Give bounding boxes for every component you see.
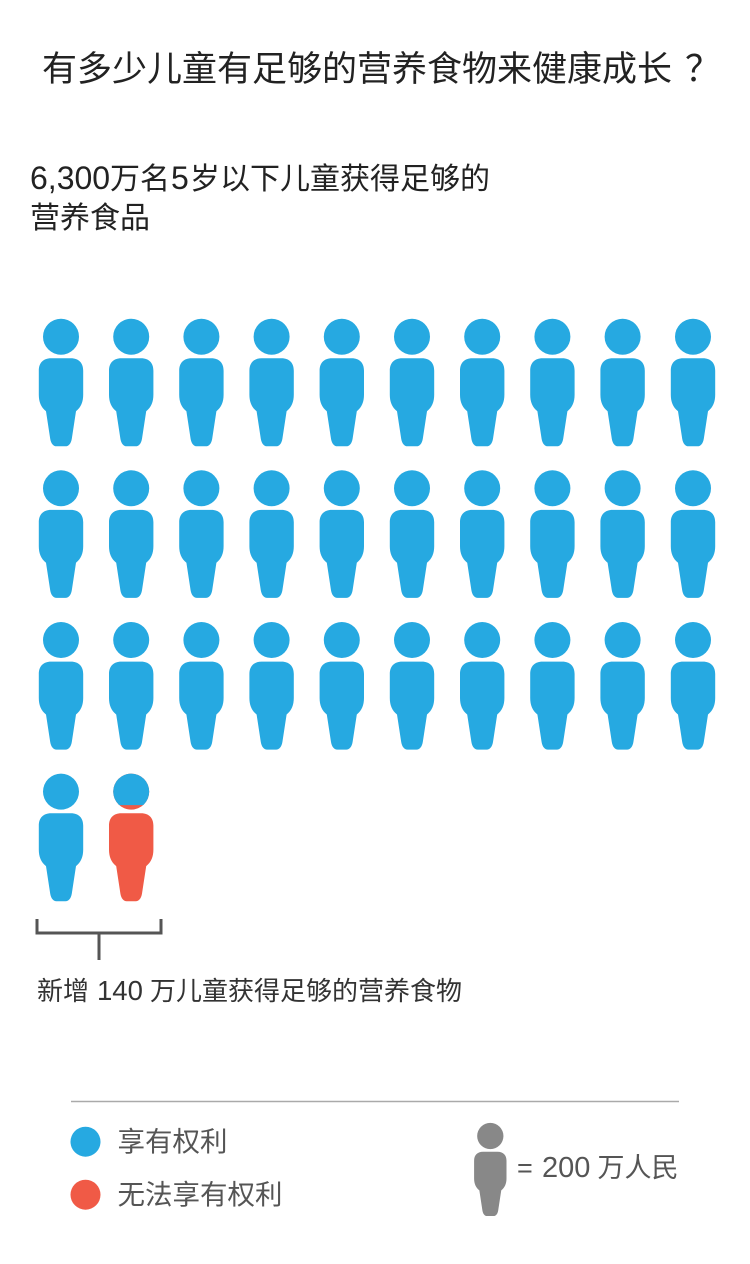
legend: person scale text: 万人民 (598, 1153, 678, 1183)
title: ？ (685, 40, 721, 92)
legend: has rights: 享有权利 (118, 1126, 228, 1157)
icon: partial red person, row 4 (109, 774, 153, 901)
title: 有多少儿童有足够的营养食物来健康成长 (42, 50, 672, 89)
bracket caption: 新增 (37, 976, 89, 1006)
subtitle: 6,300 (30, 160, 110, 196)
legend divider (71, 1100, 679, 1102)
icon: blue person, row 4 (39, 774, 83, 901)
subtitle: 万名 (110, 163, 170, 196)
legend: person scale text: = (517, 1153, 533, 1183)
subtitle (30, 160, 490, 235)
row 2 of people (39, 470, 715, 598)
row 3 of people (39, 622, 715, 750)
pictogram chart (39, 319, 715, 901)
legend: no rights: 无法享有权利 (118, 1179, 282, 1210)
bracket caption: 140 (97, 975, 143, 1006)
bracket caption: 万儿童获得足够的营养食物 (150, 976, 462, 1006)
legend: person scale text: 200 (542, 1152, 590, 1184)
subtitle: 营养食品 (30, 202, 150, 235)
subtitle: 岁以下儿童获得足够的 (190, 163, 490, 196)
subtitle: 5 (171, 160, 189, 196)
bracket (37, 919, 161, 960)
legend: person scale icon (474, 1123, 507, 1216)
row 1 of people (39, 319, 715, 446)
